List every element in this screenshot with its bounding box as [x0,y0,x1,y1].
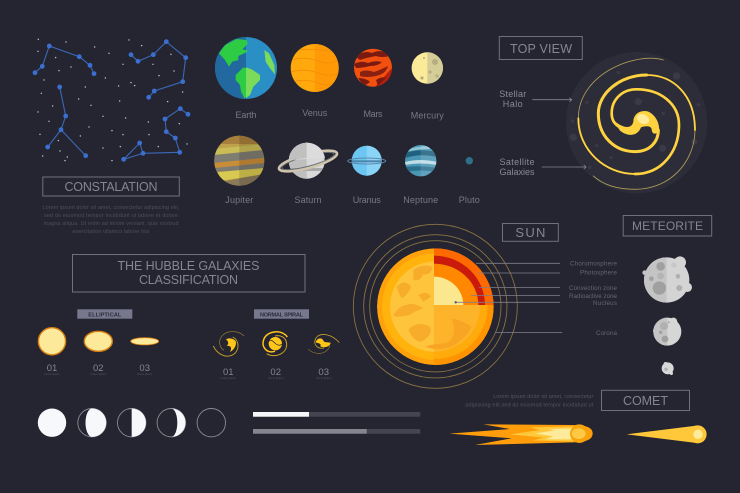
sun diagram [353,224,562,388]
label: satellite galaxies [500,157,586,177]
heading: constalation: CONSTALATION [64,180,158,194]
sun layer leaders [456,263,562,333]
panel: elliptical: lorem ipsum [137,372,153,376]
heading: comet: COMET [623,394,668,408]
panel: normal spiral: 03 [318,367,329,378]
comet: plain [627,425,707,443]
panel: elliptical: lorem ipsum [44,372,60,376]
meteorite medium [653,318,681,346]
label: stellar halo [499,89,572,109]
progress bars [253,412,420,434]
sun layer labels: Photosphere [580,270,618,276]
comet description: adipiscing elit,sed do eiusmod tempor incididunt ut [465,402,594,408]
heading: constalation [43,177,179,196]
constellation lines and nodes [35,42,188,159]
ellipses [38,328,159,355]
sun layer labels: Convection zone [569,285,618,292]
spirals [213,332,339,356]
galaxy top view [566,52,707,193]
constellation description: magna aliqua. Ut enim ad minim veniam, quis nostrud [44,221,178,227]
stellar halo [566,52,707,193]
sun layer labels: Nucleus [593,300,617,307]
comet description [465,394,594,408]
heading: hubble classification [72,254,305,292]
spiral 02 [263,332,287,356]
planet labels: Uranus [353,195,381,205]
heading: hubble classification: THE HUBBLE GALAXIES [118,259,260,273]
moon phases [38,408,225,437]
sun layer labels [569,260,618,337]
label: stellar halo: Halo [503,99,523,109]
sun layer labels: Corona [596,330,618,337]
spiral 03 [308,334,339,353]
panel: normal spiral: lorem ipsum [316,376,332,380]
planet labels [225,108,480,205]
label: satellite galaxies: Galaxies [500,167,535,177]
panel: elliptical: 03 [139,363,150,374]
galactic core [612,111,659,135]
label: satellite galaxies: Satellite [500,157,534,167]
panel: normal spiral [213,309,339,380]
panel: normal spiral: lorem ipsum [221,376,237,380]
panel: elliptical: 02 [93,363,104,374]
constellation description [42,205,180,235]
panel: elliptical: 01 [47,363,57,374]
panel: constellations [33,39,190,235]
heading: meteorite: METEORITE [632,219,703,233]
panel: elliptical [38,309,159,376]
planet labels: Neptune [403,195,438,205]
constellation description: Lorem ipsum dolor sit amet, consectetur adipiscing elit, [42,205,180,211]
heading: sun: SUN [515,225,545,240]
sun body [377,245,495,367]
planet: neptune [405,144,437,178]
panel: normal spiral: 02 [270,367,281,378]
stars [37,39,188,161]
sun layer labels: Choromosphere [570,260,618,268]
planet labels: Jupiter [225,195,253,205]
corona rings [353,224,517,388]
planet: mars [354,49,394,88]
heading: meteorite [623,216,712,236]
panel: normal spiral: lorem ipsum [268,376,284,380]
meteorite large [642,256,692,303]
planet: earth [215,37,277,99]
meteorite small [662,362,674,375]
cutaway layers [434,245,495,305]
label: stellar halo: Stellar [499,89,526,99]
heading: sun [502,224,558,241]
panel: normal spiral: 01 [223,367,234,378]
planet labels: Earth [236,110,256,120]
comet: flaming [449,424,593,445]
planet: mercury [412,52,443,84]
heading: top view [499,36,582,60]
tag: normal spiral: NORMAL SPIRAL [260,312,304,318]
heading: comet [602,390,690,410]
sun layer labels: Radioactive zone [569,293,618,300]
planet: pluto [466,157,473,164]
planet: saturn [277,142,339,179]
planet labels: Mercury [411,111,444,121]
planet labels: Venus [302,108,328,118]
planet: jupiter [214,135,265,187]
spiral arms [578,58,695,189]
meteorites [642,256,692,375]
panel: elliptical: lorem ipsum [91,372,107,376]
heading: hubble classification: CLASSIFICATION [139,273,238,287]
planet: uranus [348,146,386,176]
constellation description: exercitation ullamco labore hisi [72,229,150,235]
constellation description: sed do eiusmod tempor incididunt ut labore et dolore [44,213,178,219]
planet labels: Saturn [294,195,322,205]
comet description: Lorem ipsum dolor sit amet, consectetur [493,394,594,400]
planet labels: Mars [364,109,383,119]
planet labels: Pluto [459,195,480,205]
tag: elliptical: ELLIPTICAL [88,312,122,318]
heading: top view: TOP VIEW [510,42,572,56]
planet: venus [290,44,340,92]
spiral 01 [213,332,244,356]
surface blotches [393,266,472,349]
